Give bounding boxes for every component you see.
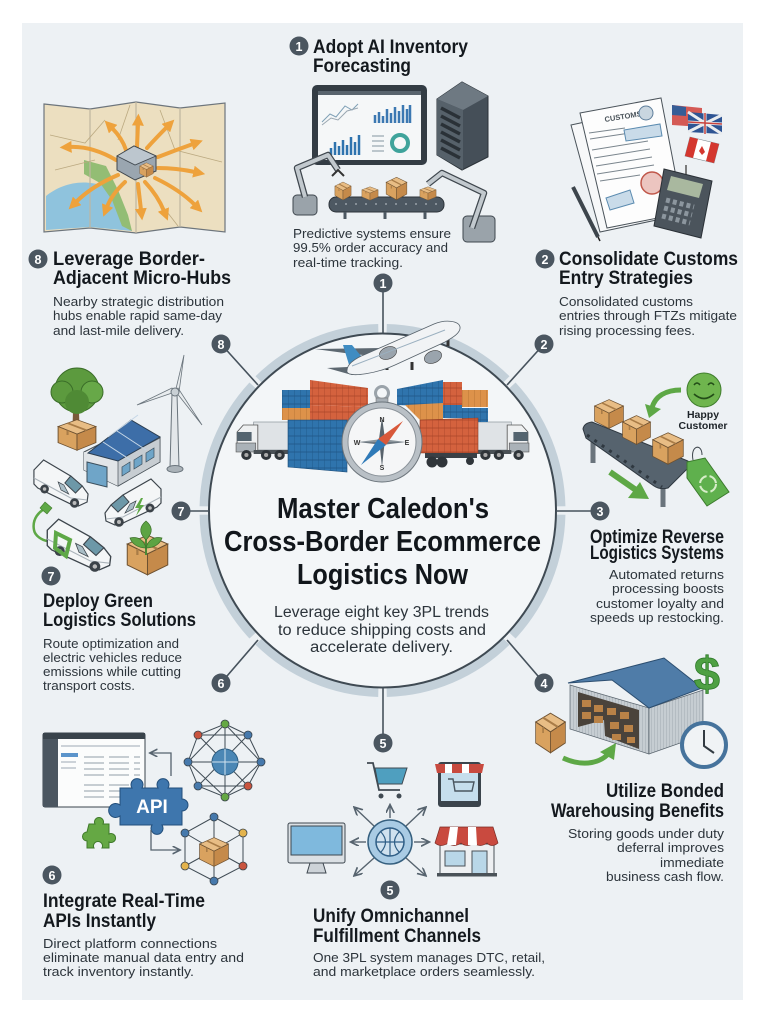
number badge 2 [536,250,554,268]
icon: warehouse, dollar, clock, box [536,647,726,767]
number badge 6: 6 [49,869,56,883]
heading 8 [53,249,231,289]
body 2: entries through FTZs mitigate [559,308,737,323]
body 8: hubs enable rapid same-day [53,308,223,323]
heading 2: Consolidate Customs [559,249,738,270]
connector 4: 4 [541,677,548,691]
main subtitle: accelerate delivery. [310,639,453,656]
heading 6: Integrate Real-Time [43,891,205,912]
heading 8: Adjacent Micro-Hubs [53,268,231,289]
heading 5 [313,906,481,947]
number badge 8: 8 [35,253,42,267]
body 3 [590,567,725,625]
airplane [315,321,460,375]
number badge 1 [290,36,308,56]
heading 7 [43,591,196,631]
icon: conveyor, happy customer, return tag: Happy [687,409,719,421]
connector 8: 8 [218,338,225,352]
body 4 [568,826,725,884]
body 1: Predictive systems ensure [293,226,451,241]
central hub circle [204,328,561,692]
heading 4: Utilize Bonded [606,781,724,802]
heading 6 [43,891,205,932]
connector 5: 5 [380,737,387,751]
body 6: eliminate manual data entry and [43,950,244,965]
body 1: 99.5% order accuracy and [293,240,448,255]
body 1: real-time tracking. [293,255,403,270]
section 1: AI inventory forecasting [290,36,495,270]
section 3: reverse logistics [583,373,729,625]
connector 6: 6 [218,677,225,691]
body 7: emissions while cutting [43,664,181,679]
body 4: deferral improves [617,840,725,855]
main subtitle: to reduce shipping costs and [278,622,486,639]
body 8: Nearby strategic distribution [53,294,224,309]
icon: conveyor with boxes and robot arms [293,155,495,242]
number badge 2: 2 [542,253,549,267]
heading 7: Logistics Solutions [43,610,196,631]
heading 3 [590,527,724,564]
heading 2 [559,249,738,289]
section 6: APIs [42,720,265,979]
body 6: track inventory instantly. [43,964,194,979]
heading 5: Fulfillment Channels [313,926,481,947]
connector 7: 7 [178,505,185,519]
body 7: electric vehicles reduce [43,650,182,665]
body 5: and marketplace orders seamlessly. [313,964,535,979]
section 2: customs entry [536,98,738,338]
heading 3: Logistics Systems [590,543,724,564]
body 2: Consolidated customs [559,294,694,309]
connector 4 [507,640,554,692]
heading 8: Leverage Border- [53,249,205,270]
body 3: Automated returns [609,567,725,582]
container stacks [282,380,488,472]
heading 4 [551,781,724,822]
body 5: One 3PL system manages DTC, retail, [313,950,545,965]
compass: E [405,440,410,447]
icon: dashboard window, API puzzle, networks [43,720,265,885]
icon: conveyor, happy customer, return tag [583,373,729,507]
number badge 6 [42,866,62,884]
icon: dashboard window, API puzzle, networks: API [136,797,168,818]
number badge 1: 1 [296,40,303,54]
icon: omnichannel globe hub [288,762,498,876]
heading 3: Optimize Reverse [590,527,724,548]
icon: conveyor, happy customer, return tag: Customer [678,420,728,432]
body 7: transport costs. [43,678,135,693]
body 7 [43,636,182,693]
body 4: Storing goods under duty [568,826,725,841]
compass: N [379,417,385,424]
connector 3 [556,502,610,520]
right truck [474,422,529,460]
connector 8 [212,334,258,385]
connector 2: 2 [541,338,548,352]
body 5 [313,950,545,979]
body 6: Direct platform connections [43,936,218,951]
number badge 7: 7 [48,570,55,584]
body 2: rising processing fees. [559,323,695,338]
icon: server rack [437,82,488,170]
body 2 [559,294,737,338]
compass: S [380,465,385,472]
heading 1: Adopt AI Inventory [313,37,468,58]
main subtitle [274,604,489,656]
heading 6: APIs Instantly [43,911,156,932]
body 7: Route optimization and [43,636,179,651]
section 5: omnichannel [288,762,545,979]
heading 2: Entry Strategies [559,268,693,289]
icon: customs documents, flags, calculator, pen: CUSTOMS [604,109,642,124]
main title [224,493,541,591]
main title: Master Caledon's [277,493,489,525]
icon: customs documents, flags, calculator, pen [571,98,722,241]
icon: tree, solar building, wind turbine, vans, plant [34,355,202,575]
section 4: bonded warehousing [536,647,726,884]
icon: map with hub and radiating arrows [44,102,225,233]
connector 6 [212,640,258,692]
heading 7: Deploy Green [43,591,153,612]
connector 3: 3 [597,505,604,519]
compass: W [354,440,361,447]
icon: tablet dashboard [312,85,427,165]
connector 7 [172,502,209,520]
body 1 [293,226,451,270]
number badge 7 [42,566,60,586]
main subtitle: Leverage eight key 3PL trends [274,604,489,621]
connector 1 [374,274,392,333]
compass [342,386,422,482]
main title: Logistics Now [297,559,468,591]
heading 1: Forecasting [313,56,411,77]
body 8: and last-mile delivery. [53,323,184,338]
body 8 [53,294,224,338]
number badge 5: 5 [387,884,394,898]
number badge 8 [28,250,48,268]
body 3: speeds up restocking. [590,610,724,625]
body 3: processing boosts [612,581,725,596]
heading 4: Warehousing Benefits [551,801,724,822]
section 7: green logistics [34,355,202,693]
connector 5 [374,688,392,752]
connector 2 [507,334,554,385]
body 4: business cash flow. [606,869,724,884]
heading 5: Unify Omnichannel [313,906,469,927]
left truck [236,422,291,460]
connector 1: 1 [380,277,387,291]
hub illustration: containers, trucks, plane, compass [236,321,529,482]
main title: Cross-Border Ecommerce [224,526,541,558]
body 4: immediate [660,855,724,870]
icon: warehouse, dollar, clock, box: $ [694,647,720,700]
body 3: customer loyalty and [596,596,724,611]
section 8: micro-hubs [28,102,231,338]
body 6 [43,936,244,979]
heading 1 [313,37,468,77]
number badge 5 [380,880,400,900]
